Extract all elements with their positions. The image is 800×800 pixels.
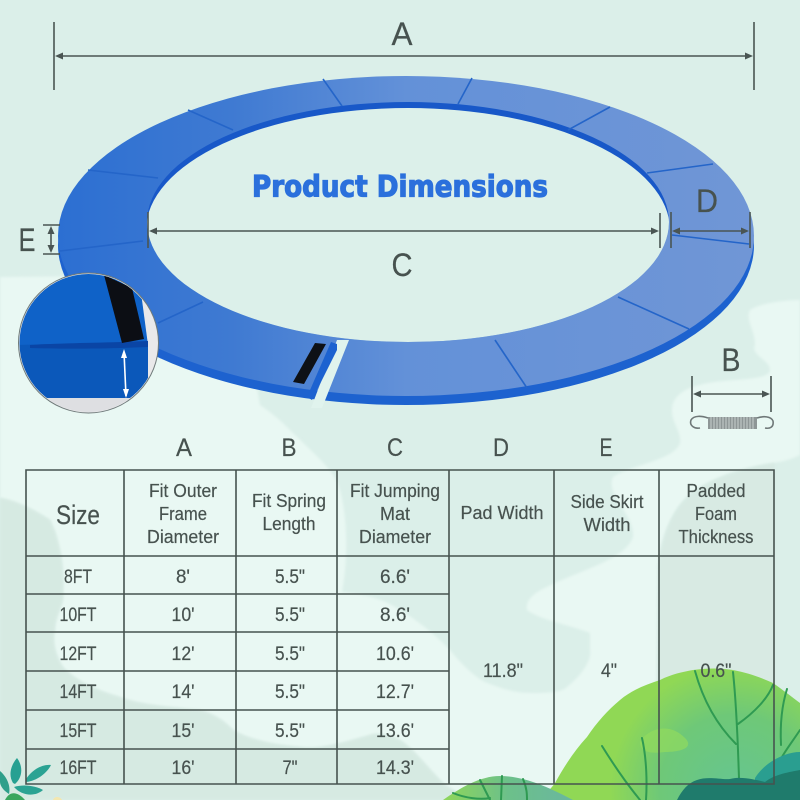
column letters: E xyxy=(600,434,612,462)
row: 10FT: 5.5" xyxy=(275,605,305,626)
pad top surface xyxy=(58,76,754,396)
hill: large green xyxy=(535,668,800,800)
inset: side skirt detail xyxy=(15,270,158,415)
table header: Pad Width xyxy=(460,503,544,523)
table header: Fit Jumping xyxy=(350,481,440,501)
row: 12FT: 5.5" xyxy=(275,644,305,665)
table header: Side Skirt xyxy=(570,492,644,512)
dimension E: E xyxy=(18,222,36,258)
icon: spring xyxy=(691,416,773,429)
column letters: D xyxy=(493,434,509,462)
dimension B with spring: B xyxy=(722,342,740,378)
table header: Thickness xyxy=(678,527,754,547)
row: 15FT: 13.6' xyxy=(376,721,414,742)
row: 15FT: 15FT xyxy=(60,721,97,742)
table header: Fit Spring xyxy=(252,491,326,511)
row: 10FT: 10' xyxy=(172,605,194,626)
row: 15FT: 15' xyxy=(172,721,194,742)
row: 16FT: 16FT xyxy=(60,758,97,779)
merged values xyxy=(483,661,732,682)
row: 15FT xyxy=(60,721,414,742)
dimension A xyxy=(54,16,754,90)
merged values: 0.6" xyxy=(700,661,732,682)
row: 16FT: 16' xyxy=(172,758,194,779)
row: 15FT: 5.5" xyxy=(275,721,305,742)
row: 12FT: 10.6' xyxy=(376,644,414,665)
table header: Width xyxy=(584,515,630,535)
row: 14FT: 14' xyxy=(172,682,194,703)
table header xyxy=(56,481,754,547)
pad gap xyxy=(311,340,349,408)
inset velcro xyxy=(104,275,144,343)
row: 16FT: 14.3' xyxy=(376,758,414,779)
table header: Diameter xyxy=(147,527,219,547)
row: 12FT xyxy=(60,644,414,665)
row: 16FT xyxy=(60,758,414,779)
inset white arrow xyxy=(121,349,129,398)
table header: Length xyxy=(262,514,316,534)
pad end face xyxy=(307,342,337,400)
column letters xyxy=(176,434,612,462)
row: 14FT: 5.5" xyxy=(275,682,305,703)
row: 10FT: 10FT xyxy=(60,605,97,626)
center opening xyxy=(146,108,670,352)
row: 10FT: 8.6' xyxy=(380,605,410,626)
row: 16FT: 7" xyxy=(282,758,298,779)
icon: leaves xyxy=(0,758,62,800)
table header: Diameter xyxy=(359,527,431,547)
row: 10FT xyxy=(60,605,410,626)
row: 12FT: 12' xyxy=(172,644,194,665)
merged values: 4" xyxy=(601,661,617,682)
pad seams xyxy=(60,78,749,388)
row: 8FT: 8' xyxy=(176,567,190,588)
row: 14FT xyxy=(60,682,414,703)
table header: Fit Outer xyxy=(149,481,217,501)
velcro strip xyxy=(293,343,326,384)
hill: small green xyxy=(443,776,573,800)
size table xyxy=(26,470,774,784)
row: 14FT: 12.7' xyxy=(376,682,414,703)
table header: Mat xyxy=(380,504,410,524)
table header: Size xyxy=(56,500,100,530)
title: Product Dimensions xyxy=(252,170,548,204)
table grid xyxy=(26,470,774,784)
dimension D: D xyxy=(696,183,718,219)
dimension A: A xyxy=(392,16,413,52)
table header: Frame xyxy=(159,504,207,524)
dimension B with spring xyxy=(691,342,773,429)
dimension D xyxy=(671,183,750,248)
row: 14FT: 14FT xyxy=(60,682,97,703)
hill: dark teal xyxy=(677,752,800,800)
pad side edge xyxy=(58,85,754,405)
row: 8FT: 8FT xyxy=(64,567,92,588)
dimension E xyxy=(18,222,60,258)
inset blue pad xyxy=(15,270,148,345)
column letters: C xyxy=(387,434,403,462)
trampoline pad ring xyxy=(58,76,754,408)
dimension C: C xyxy=(392,247,412,283)
column letters: A xyxy=(176,434,192,462)
row: 8FT: 6.6' xyxy=(380,567,410,588)
merged values: 11.8" xyxy=(483,661,523,682)
dimension C xyxy=(148,212,660,283)
table header: Foam xyxy=(695,504,737,524)
row: 8FT: 5.5" xyxy=(275,567,305,588)
inner wall xyxy=(147,102,669,342)
row: 12FT: 12FT xyxy=(60,644,97,665)
row: 8FT xyxy=(64,567,410,588)
column letters: B xyxy=(282,434,296,462)
table header: Padded xyxy=(686,481,746,501)
